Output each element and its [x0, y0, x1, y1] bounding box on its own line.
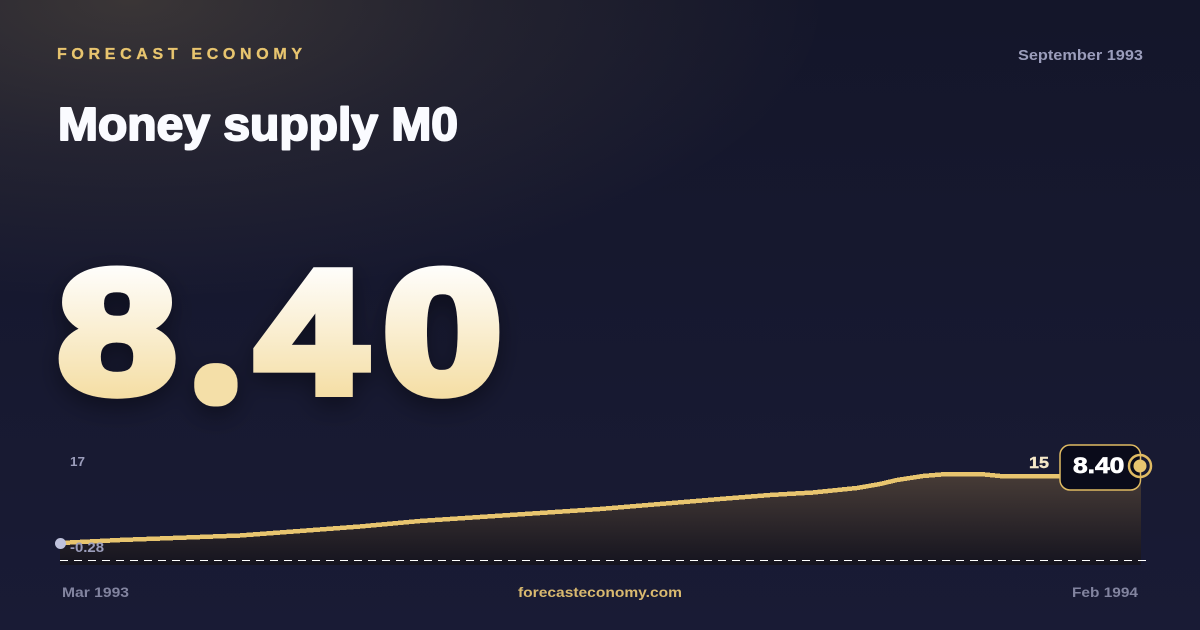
peak label: 15	[1029, 455, 1049, 472]
current value callout: 8.40	[1073, 454, 1124, 478]
start date: Mar 1993	[62, 584, 129, 600]
big value	[58, 234, 502, 430]
axis maximum label: 17	[70, 454, 85, 469]
area under line	[60, 466, 1141, 565]
big value: 4	[256, 234, 366, 429]
line chart	[55, 445, 1151, 565]
brand label: FORECAST ECONOMY	[57, 46, 302, 63]
zero baseline	[60, 560, 1146, 562]
current point marker	[1129, 455, 1151, 477]
big value: .	[212, 361, 220, 394]
axis minimum label: -0.28	[70, 539, 104, 555]
big value: 0	[383, 235, 502, 429]
start point	[55, 538, 66, 549]
date label: September 1993	[1018, 47, 1143, 64]
end date: Feb 1994	[1072, 584, 1138, 600]
website: forecasteconomy.com	[518, 584, 682, 600]
data line	[60, 474, 1060, 543]
big value: 8	[58, 235, 176, 430]
current value callout	[1060, 445, 1140, 490]
title: Money supply M0	[58, 98, 458, 150]
